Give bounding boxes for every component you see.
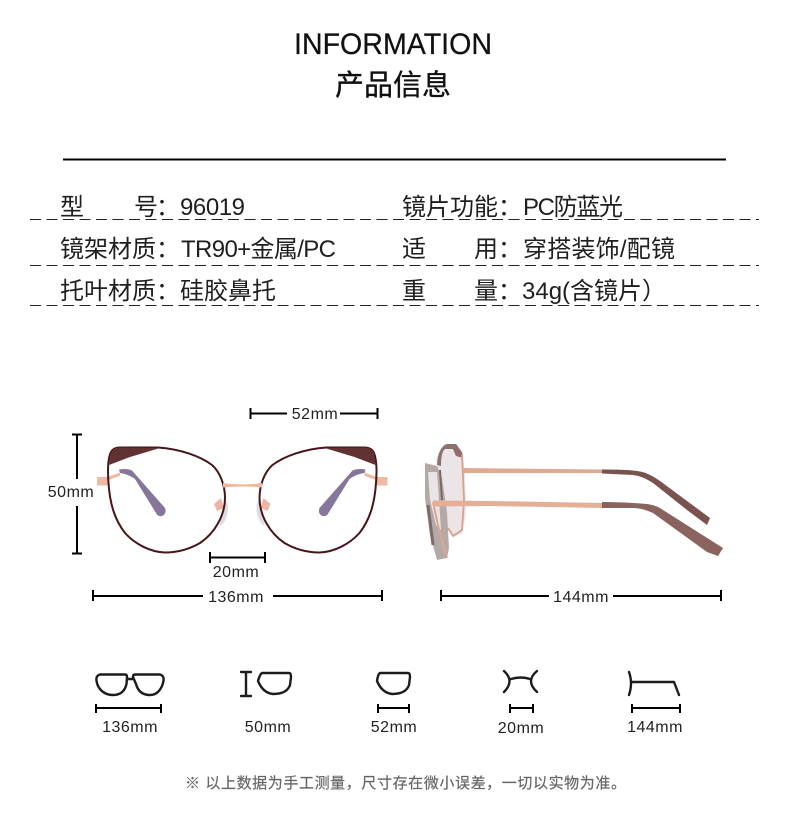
dimension: temple length 144mm: 144mm (553, 589, 609, 606)
spec: usage: ： (498, 236, 522, 263)
spec: usage: 穿搭装饰/配镜 (523, 236, 675, 263)
lens frame (108, 448, 225, 552)
spec: nose pad material: 托叶材质 (60, 278, 156, 305)
icon: lens height: 50mm (245, 719, 291, 736)
spec: frame material: 镜架材质 (60, 236, 156, 263)
footnote: ※ 以上数据为手工测量，尺寸存在微小误差，一切以实物为准。 (185, 775, 627, 792)
side view of glasses (425, 444, 723, 560)
spec: frame material: TR90+金属/PC (181, 236, 336, 263)
spec: model number: 号 (134, 194, 158, 221)
nose pad (220, 500, 228, 526)
spec: lens function: ： (498, 194, 522, 221)
temple arm: upper (463, 468, 602, 473)
title: INFORMATION (294, 28, 492, 61)
temple tip: lower (602, 502, 723, 556)
dimension: lens width 52mm: 52mm (292, 406, 338, 423)
spec: nose pad material: ： (156, 278, 180, 305)
spec: lens function: PC防蓝光 (523, 194, 623, 221)
spec: weight: ： (498, 278, 522, 305)
dimension: frame width 136mm (93, 589, 382, 606)
icon: temple length (627, 672, 683, 736)
dimension: frame width 136mm: 136mm (208, 589, 264, 606)
spec: weight: 34g(含镜片） (522, 278, 666, 305)
temple tip: upper (602, 470, 710, 525)
icon: full frame width (96, 674, 164, 736)
title (294, 28, 492, 102)
icon: lens width: 52mm (371, 719, 417, 736)
dimension: lens width 52mm (250, 406, 378, 423)
spec: usage (402, 236, 675, 263)
front view of glasses (97, 448, 388, 552)
spec: usage: 用 (474, 236, 498, 263)
icon: bridge width (498, 671, 544, 737)
dimension: lens height 50mm: 50mm (48, 484, 94, 501)
icon: lens width (371, 673, 417, 736)
icon: bridge width: 20mm (498, 720, 544, 737)
hinge (97, 472, 120, 486)
icon: temple length: 144mm (627, 719, 683, 736)
spec: frame material (60, 236, 336, 263)
icon: full frame width: 136mm (102, 719, 158, 736)
spec: weight: 重 (402, 278, 426, 305)
right half of frame (256, 448, 388, 552)
spec: nose pad material (60, 278, 276, 305)
dimension: lens height 50mm (48, 434, 94, 554)
spec: weight: 量 (474, 278, 498, 305)
spec: nose pad material: 硅胶鼻托 (180, 278, 276, 305)
spec: weight (402, 278, 666, 305)
dimension: bridge 20mm (210, 552, 265, 581)
lens: back (436, 444, 466, 537)
icon: lens height (241, 672, 291, 736)
spec: usage: 适 (402, 236, 426, 263)
spec: frame material: ： (156, 236, 180, 263)
wing (109, 448, 160, 465)
title: 产品信息 (335, 69, 451, 102)
temple arm (119, 469, 166, 516)
dimension: bridge 20mm: 20mm (213, 564, 259, 581)
bridge (223, 483, 262, 488)
spec: lens function: 镜片功能 (402, 194, 498, 221)
spec: model number (60, 194, 245, 221)
temple arm: lower (433, 500, 602, 508)
dimension: temple length 144mm (441, 589, 721, 606)
left half of frame (97, 448, 228, 552)
panel: product specifications (30, 194, 759, 306)
spec: model number: 96019 (180, 194, 245, 221)
lens: front (425, 463, 449, 560)
spec: model number: 型 (60, 194, 84, 221)
spec: model number: ： (156, 194, 180, 221)
spec: lens function (402, 194, 623, 221)
